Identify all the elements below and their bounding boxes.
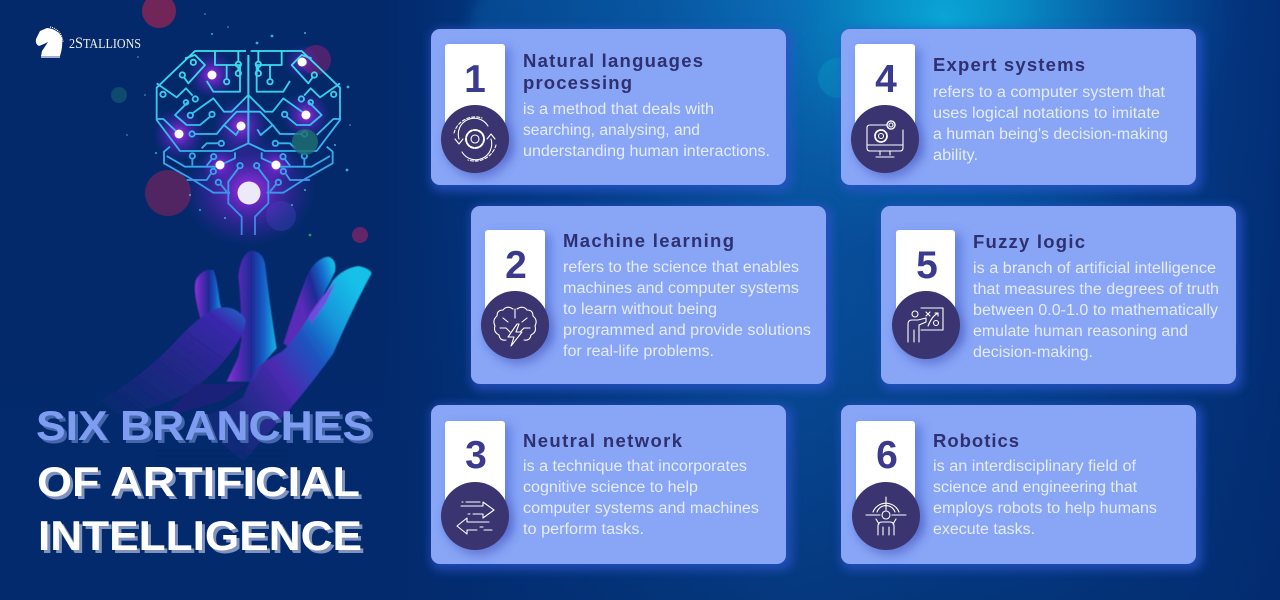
description: that measures the degrees of truth xyxy=(973,281,1219,298)
heading: Expert systems xyxy=(933,54,1085,75)
heading: Robotics xyxy=(933,430,1019,451)
number tab xyxy=(856,421,915,511)
finger: ring xyxy=(227,251,277,382)
heading line 1: SIX BRANCHES xyxy=(39,405,375,452)
description: decision-making. xyxy=(973,344,1093,361)
number: 5 xyxy=(916,244,938,287)
panel 1: natural languages processing xyxy=(431,29,792,191)
description: emulate human reasoning and xyxy=(973,323,1188,340)
heading line 2: OF ARTIFICIAL xyxy=(37,458,360,505)
heading: Natural languages xyxy=(523,50,703,71)
description xyxy=(933,84,1168,164)
decorative bubbles xyxy=(111,0,368,243)
heading xyxy=(523,50,703,93)
palm and index finger xyxy=(187,266,372,462)
heading line 1: SIX BRANCHES xyxy=(36,402,372,449)
heading: Neutral network xyxy=(523,430,683,451)
number: 3 xyxy=(465,434,487,477)
heading line 3: INTELLIGENCE xyxy=(41,515,365,562)
description: ability. xyxy=(933,147,978,164)
icon: horse head xyxy=(36,27,63,57)
description xyxy=(973,260,1219,361)
description: employs robots to help humans xyxy=(933,500,1157,517)
heading: Machine learning xyxy=(563,230,734,251)
description: searching, analysing, and xyxy=(523,122,700,139)
star dust xyxy=(126,13,351,236)
finger: middle xyxy=(283,257,335,347)
description: between 0.0-1.0 to mathematically xyxy=(973,302,1218,319)
panel 3: neutral network xyxy=(431,405,792,570)
number tab xyxy=(896,230,955,320)
description: is a method that deals with xyxy=(523,101,714,118)
description: is an interdisciplinary field of xyxy=(933,458,1137,475)
description: cognitive science to help xyxy=(523,479,698,496)
description: machines and computer systems xyxy=(563,280,799,297)
number tab xyxy=(445,421,505,511)
description xyxy=(933,458,1157,538)
number tab xyxy=(855,44,915,134)
number: 4 xyxy=(875,58,897,101)
description xyxy=(523,101,770,160)
heading: processing xyxy=(523,72,632,93)
panel 5: fuzzy logic xyxy=(881,206,1242,390)
number tab xyxy=(445,44,505,134)
glowing nodes xyxy=(174,58,310,204)
illustration: hand xyxy=(100,251,372,467)
illustration: circuit brain xyxy=(126,13,351,246)
brand name: 2STALLIONS xyxy=(69,35,141,52)
icon circle: exchange arrows xyxy=(441,482,509,550)
description: execute tasks. xyxy=(933,521,1035,538)
number: 2 xyxy=(505,244,527,287)
number tab xyxy=(485,230,545,320)
title xyxy=(36,402,375,562)
description xyxy=(523,458,759,538)
logo: 2Stallions xyxy=(36,27,141,57)
icon circle: computer with gears xyxy=(851,105,919,173)
number: 1 xyxy=(464,58,486,101)
description: for real-life problems. xyxy=(563,343,714,360)
description: is a technique that incorporates xyxy=(523,458,747,475)
description: uses logical notations to imitate xyxy=(933,105,1160,122)
description: science and engineering that xyxy=(933,479,1138,496)
description: understanding human interactions. xyxy=(523,143,770,160)
description: a human being's decision-making xyxy=(933,126,1168,143)
icon circle: presenter at strategy board xyxy=(892,291,960,359)
finger: little xyxy=(195,270,223,327)
heading line 3: INTELLIGENCE xyxy=(38,512,362,559)
number: 6 xyxy=(876,434,898,477)
panel 4: expert systems xyxy=(841,29,1202,191)
description xyxy=(563,259,811,360)
icon circle: robot sensor xyxy=(852,482,920,550)
description: programmed and provide solutions xyxy=(563,322,811,339)
description: computer systems and machines xyxy=(523,500,759,517)
panel 2: machine learning xyxy=(471,206,832,390)
description: to perform tasks. xyxy=(523,521,644,538)
description: refers to a computer system that xyxy=(933,84,1166,101)
heading line 2: OF ARTIFICIAL xyxy=(40,461,363,508)
icon circle: gear with cycle arrows xyxy=(441,105,509,173)
panel 6: robotics xyxy=(841,405,1202,570)
thumb xyxy=(100,307,246,415)
description: is a branch of artificial intelligence xyxy=(973,260,1216,277)
heading: Fuzzy logic xyxy=(973,231,1085,252)
description: to learn without being xyxy=(563,301,717,318)
icon circle: brain with lightning xyxy=(481,291,549,359)
description: refers to the science that enables xyxy=(563,259,799,276)
